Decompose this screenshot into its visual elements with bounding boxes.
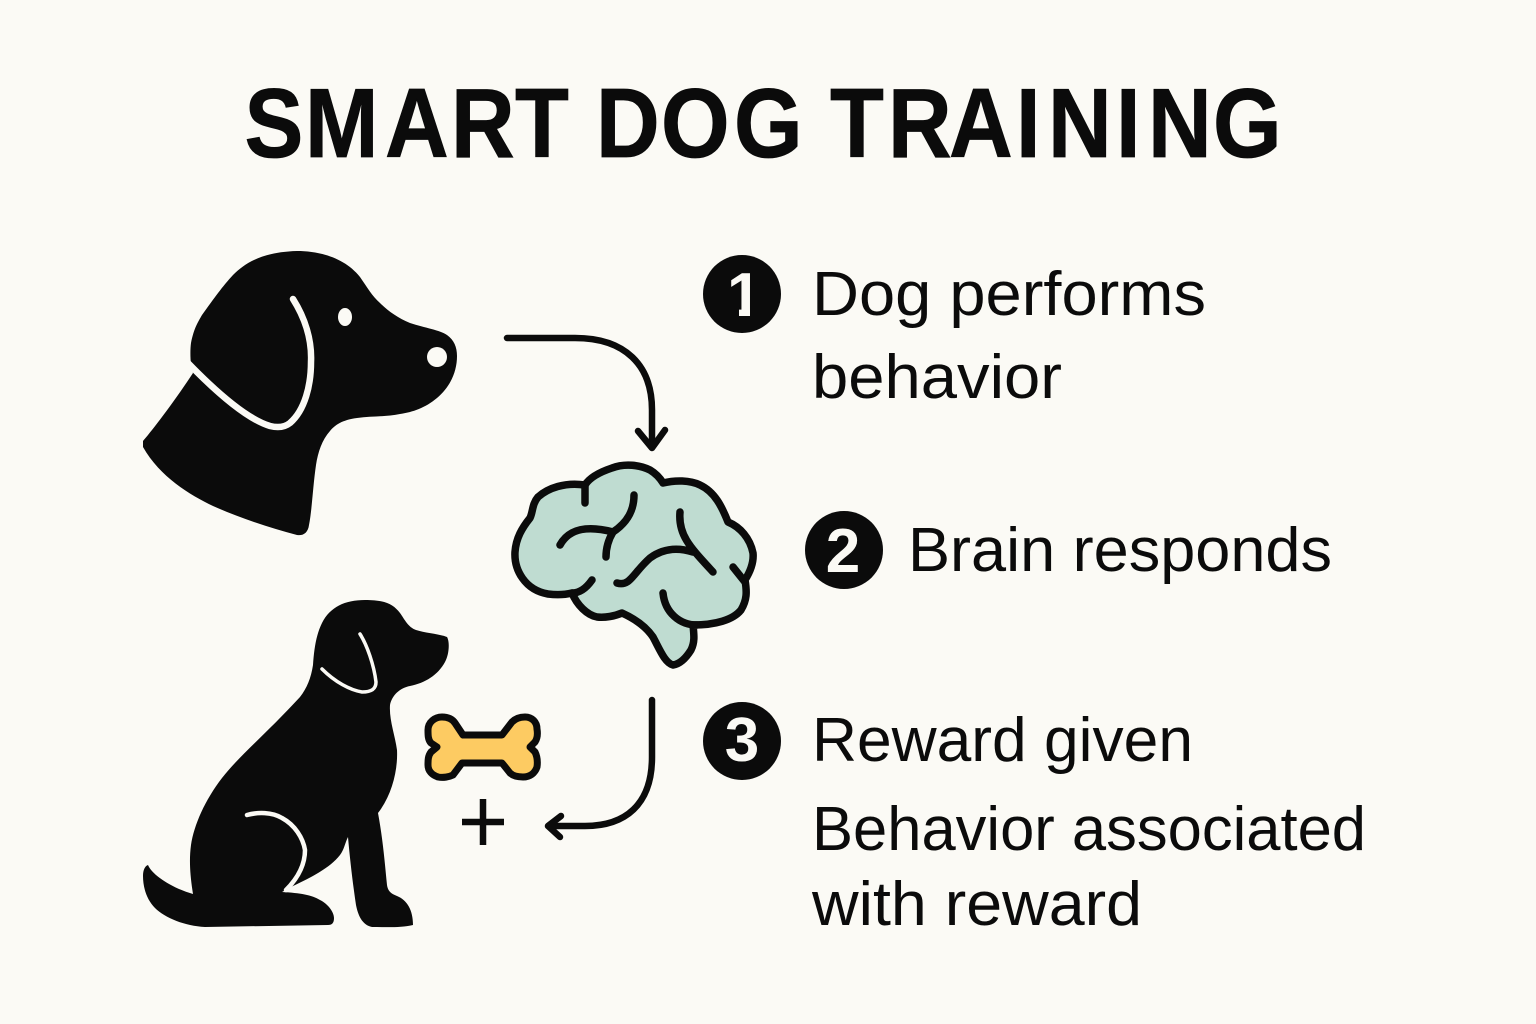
step 2 badge [805, 511, 883, 589]
step 1 badge [703, 255, 781, 333]
step 3 badge [703, 702, 781, 780]
icon: dog head [143, 251, 457, 535]
step 1 text: behavior [812, 343, 1062, 412]
arrow: dog to brain [507, 338, 665, 448]
arrow: brain to reward [548, 700, 652, 837]
icon: plus [462, 799, 504, 845]
step 3 text: Behavior associated [812, 795, 1366, 864]
title: SMART DOG TRAINING [245, 69, 1282, 178]
step 3 text: Reward given [812, 706, 1193, 775]
step 2 text: Brain responds [908, 516, 1332, 585]
step 1 text: Dog performs [812, 260, 1206, 329]
step 3 badge: 3 [725, 706, 759, 775]
icon: sitting dog [143, 600, 449, 927]
step 3 text: with reward [811, 870, 1142, 939]
step 1 badge: 1 [727, 261, 761, 330]
icon: bone [428, 717, 537, 777]
step 2 badge: 2 [826, 517, 860, 586]
icon: brain [515, 465, 753, 665]
